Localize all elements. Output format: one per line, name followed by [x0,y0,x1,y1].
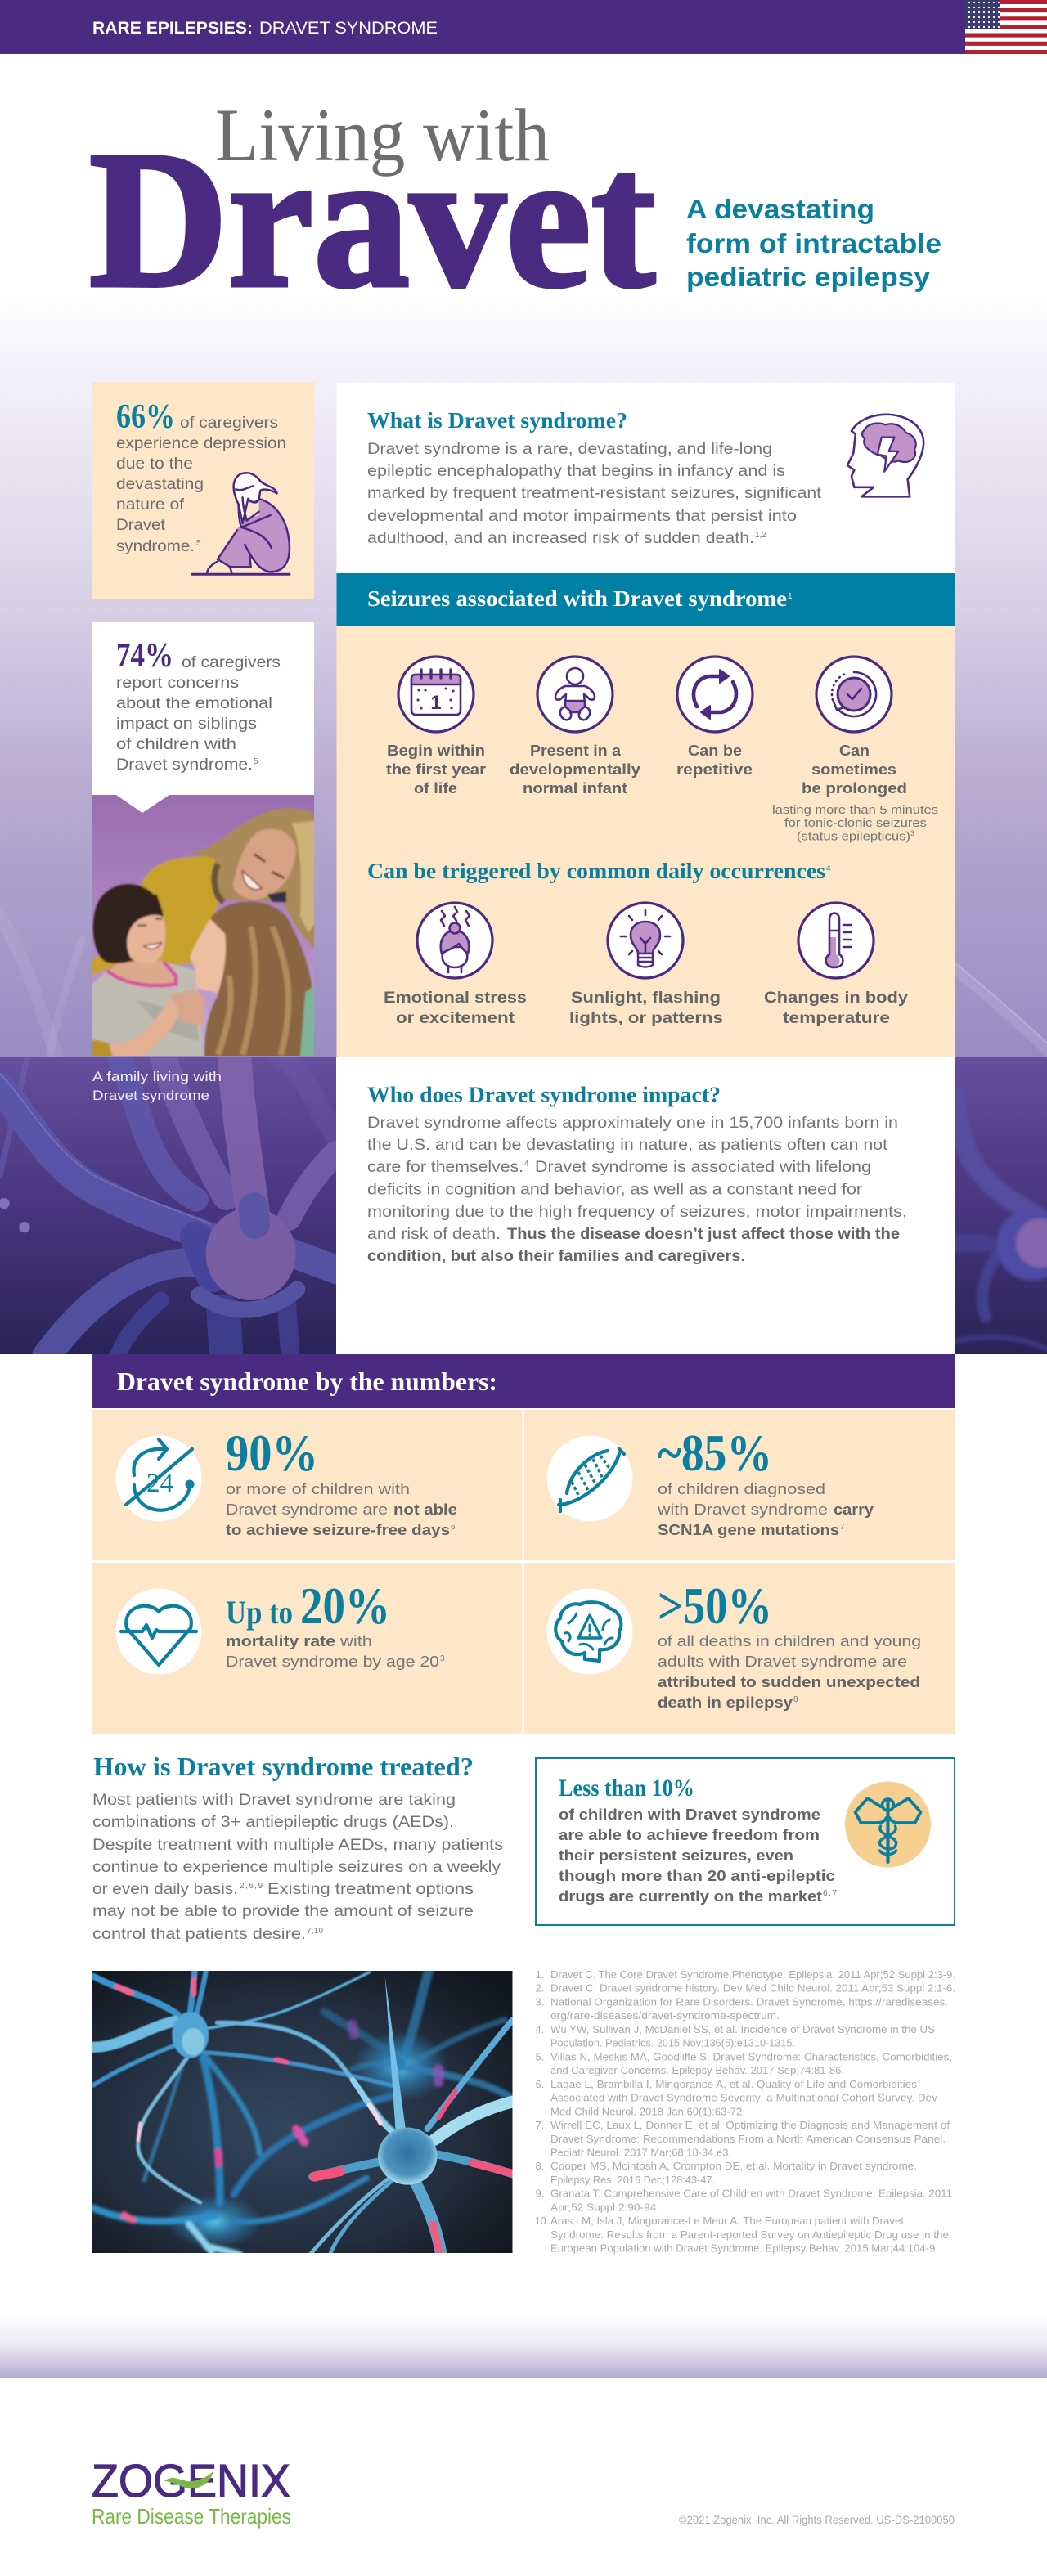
text block: treatment: control that patients desire. [92,1926,306,1943]
photo: neurons [92,1971,513,2255]
stat: 66%: 66% [116,398,175,436]
references: Wirrell EC, Laux L, Donner E, et al. Optimizing the Diagnosis and Management of [550,2119,950,2131]
labels: seizure characteristics: lasting more than 5 minutes [772,803,938,817]
text block: treatment: continue to experience multiple seizures on a weekly [92,1859,501,1876]
references: Population. Pediatrics. 2015 Nov;136(5):e1310-1315. [550,2037,795,2049]
stat panel: >50% [524,1563,955,1734]
references: Dravet C. Dravet syndrome history. Dev Med Child Neurol. 2011 Apr;53 Suppl 2:1-6. [550,1982,955,1995]
text block: treatment: Despite treatment with multiple AEDs, many patients [92,1837,503,1854]
labels: seizure characteristics: (status epilepticus) [797,829,910,844]
caption: A family living with [92,1069,222,1084]
stat panel: >50%: death in epilepsy [658,1694,793,1711]
labels: seizure characteristics: of life [414,779,457,797]
logo: Zogenix [92,2455,291,2529]
labels: triggers: Sunlight, flashing [571,990,721,1007]
references: 2. [535,1982,544,1995]
logo: Zogenix: Rare Disease Therapies [92,2504,291,2529]
band: seizures heading: 1 [788,592,793,601]
header bar [0,0,1047,54]
text block: treatment: combinations of 3+ antiepileptic drugs (AEDs). [92,1814,454,1831]
text block: impact: Thus the disease doesn’t just affect those with the [507,1226,900,1243]
panel: who does Dravet impact [337,1057,955,1354]
text block: impact: Dravet syndrome affects approximately one in 15,700 infants born in [367,1115,898,1132]
stat panel: 90%: to achieve seizure-free days [226,1521,450,1538]
icon: calendar: 1 [430,692,442,714]
references: 9. [535,2188,544,2200]
little girl's face [127,915,165,963]
text block: treatment: Existing treatment options [267,1881,474,1898]
text: depression statement: devastating [116,476,204,493]
labels: seizure characteristics: repetitive [676,761,753,778]
references: Villas N, Meskis MA, Goodliffe S. Dravet Syndrome: Characteristics, Comorbidities, [550,2050,952,2062]
background: dark neuron band left [0,1049,338,1356]
text block: impact: Dravet syndrome is associated with lifelong [535,1159,871,1176]
text: siblings statement: about the emotional [116,695,272,712]
text block: impact: and risk of death. [367,1226,501,1243]
labels: triggers: or excitement [396,1010,515,1027]
icon: US flag [965,0,1047,54]
references: Apr;52 Suppl 2:90-94. [550,2201,659,2213]
footer gradient band [0,2314,1047,2378]
heading: Who does Dravet syndrome impact? [367,1081,721,1107]
text block: definition: developmental and motor impairments that persist into [367,508,797,525]
references: Aras LM, Isla J, Mingorance-Le Meur A. The European patient with Dravet [550,2215,904,2227]
icon: light bulb [608,903,683,978]
references: Epilepsy Res. 2016 Dec;128:43-47. [550,2174,715,2186]
stat panel: 90% [92,1410,522,1560]
band: by the numbers heading [92,1354,955,1408]
band: by the numbers heading: Dravet syndrome by the numbers: [117,1367,497,1396]
header bar: DRAVET SYNDROME [259,18,438,38]
caption: Dravet syndrome [92,1088,209,1103]
text: depression statement: syndrome. [116,538,195,555]
references: 8. [535,2160,544,2172]
stat panel: >50%: attributed to sudden unexpected [658,1673,920,1690]
labels: seizure characteristics: Begin within [387,742,485,759]
references: Associated with Dravet Syndrome Severity: a Multinational Cohort Survey. Dev [550,2092,938,2104]
little girl's neck [109,961,176,985]
stat panel: ~85%: of children diagnosed [658,1480,825,1497]
labels: seizure characteristics: for tonic-clonic seizures [784,816,927,830]
text block: definition: marked by frequent treatment-resistant seizures, significant [367,485,822,502]
text: depression statement [116,415,286,555]
panel: 74% caregivers [92,622,314,795]
text block: definition: adulthood, and an increased risk of sudden death. [367,530,754,547]
icon: heart with ECG [116,1588,201,1675]
sweater [90,856,218,976]
copyright: ©2021 Zogenix, Inc. All Rights Reserved. US-DS-2100050 [679,2514,955,2526]
references: Pediatr Neurol. 2017 Mar;68:18-34.e3. [550,2146,731,2159]
text block: definition: epileptic encephalopathy that begins in infancy and is [367,463,785,480]
callout: less than 10%: are able to achieve freedom from [559,1826,820,1843]
text: siblings statement: impact on siblings [116,716,257,733]
little girl's hair [92,884,164,963]
notch: speech bubble pointer [116,795,169,813]
text block: treatment: may not be able to provide the amount of seizure [92,1903,474,1920]
stat panel: up to 20%: Dravet syndrome by age 20 [226,1653,439,1670]
title: Dravet [89,110,655,328]
references: National Organization for Rare Disorders. Dravet Syndrome. https://rarediseases. [550,1995,948,2008]
icon: 24 hour cycle: 24 [146,1469,173,1498]
subtitle: form of intractable [686,228,941,258]
references: Dravet C. The Core Dravet Syndrome Phenotype. Epilepsia. 2011 Apr;52 Suppl 2:3-9. [550,1968,955,1981]
labels: triggers: lights, or patterns [569,1010,723,1027]
references: Cooper MS, Mcintosh A, Crompton DE, et al. Mortality in Dravet syndrome. [550,2160,917,2172]
subtitle: A devastating [686,194,874,224]
labels: seizure characteristics: be prolonged [802,779,907,797]
panel: what is Dravet syndrome [337,383,955,573]
icon: caduceus [845,1781,931,1868]
icon: repeat arrows [677,657,753,732]
stat panel: >50%: 8 [793,1695,798,1704]
icon: clock [816,657,892,732]
stat panel: 90%: not able [393,1501,457,1518]
references: Dravet Syndrome: Recommendations From a North American Consensus Panel. [550,2133,946,2145]
labels: triggers [384,990,908,1027]
section: how is Dravet treated [92,1752,503,1943]
arm [109,1000,182,1058]
mother's hair [191,808,317,951]
stat panel: ~85%: 7 [840,1523,845,1532]
panel: 66% caregivers [92,382,314,599]
logo: Zogenix: ZOGENIX [92,2455,290,2507]
text: siblings statement: Dravet syndrome. [116,756,253,774]
band: seizures heading [337,573,955,626]
labels: seizure characteristics: sometimes [811,761,896,778]
references: Lagae L, Brambilla I, Mingorance A, et al. Quality of Life and Comorbidities [550,2078,918,2090]
labels: seizure characteristics: Present in a [530,742,622,759]
labels: seizure characteristics: Can be [688,742,742,759]
references: and Caregiver Concerns. Epilepsy Behav. 2017 Sep;74:81-86. [550,2064,844,2076]
stat panel: >50%: >50% [658,1577,772,1635]
references: Wu YW, Sullivan J, McDaniel SS, et al. Incidence of Dravet Syndrome in the US [550,2023,935,2035]
references: Syndrome: Results from a Parent-reported Survey on Antiepileptic Drug use in the [550,2228,949,2241]
icon: thermometer [798,903,874,978]
text block: treatment [92,1792,503,1943]
panel: seizures and triggers [337,626,955,1057]
references: Granata T. Comprehensive Care of Children with Dravet Syndrome. Epilepsia. 2011 [550,2188,952,2200]
labels: seizure characteristics: 3 [910,829,914,837]
icon: stressed woman [417,903,492,978]
text block: impact: deficits in cognition and behavior, as well as a constant need for [367,1181,863,1199]
text: siblings statement: report concerns [116,675,239,692]
older girl's face [191,918,226,993]
labels: triggers: temperature [783,1010,890,1027]
hands [169,990,204,1026]
references: European Population with Dravet Syndrome. Epilepsy Behav. 2015 Mar;44:104-9. [550,2242,938,2255]
callout: less than 10%: Less than 10% [559,1775,694,1802]
older girl's hair [204,901,317,1058]
photo: family living with Dravet syndrome [90,792,317,1058]
text block: treatment: 2,6,9 [240,1882,263,1891]
icon: 24 hour cycle [116,1436,201,1521]
stat panel: up to 20%: 3 [440,1654,445,1663]
stat panel: 90%: 90% [226,1424,318,1482]
stat panel: 90%: 6 [451,1523,456,1532]
stat panel: 90%: Dravet syndrome are [226,1501,388,1518]
text block: definition: Dravet syndrome is a rare, devastating, and life-long [367,441,772,458]
icon: calendar [398,657,474,732]
labels: seizure characteristics [386,742,938,844]
icon: brain with warning [546,1588,633,1675]
text: depression statement: 5 [196,539,201,548]
text block: definition [367,441,822,547]
icon: infant [537,657,613,732]
stat panel: >50%: of all deaths in children and young [658,1632,921,1649]
stat panel: ~85%: ~85% [658,1424,772,1482]
text: siblings statement: of caregivers [182,654,281,671]
heading: How is Dravet syndrome treated? [93,1752,474,1781]
subtitle [686,194,941,292]
labels: seizure characteristics: the first year [386,761,486,778]
band: seizures heading: Seizures associated with Dravet syndrome [367,586,787,611]
references: 6. [535,2078,544,2090]
text: depression statement: experience depression [116,435,286,452]
text block: impact: monitoring due to the high frequency of seizures, motor impairments, [367,1204,907,1221]
stat panel: up to 20%: mortality rate [226,1632,335,1649]
callout: less than 10%: of children with Dravet syndrome [559,1806,820,1823]
references: 4. [535,2023,544,2035]
references: 10. [535,2215,549,2227]
little girl's shirt [90,961,203,1058]
references: 5. [535,2050,544,2062]
icon: DNA [546,1436,633,1521]
text block: treatment: Most patients with Dravet syndrome are taking [92,1792,456,1809]
text block: treatment: 7,10 [307,1927,323,1936]
stat panel: up to 20%: Up to [226,1594,293,1631]
heading: triggers: Can be triggered by common daily occurrences [367,858,825,883]
references: 3. [535,1995,544,2008]
icon: head with brain and lightning [847,415,923,496]
stat panel: ~85%: with Dravet syndrome [657,1501,828,1518]
background: dark neuron band right [955,1057,1047,1354]
callout: less than 10%: though more than 20 anti-epileptic [559,1867,835,1884]
stat panel: up to 20%: with [339,1632,372,1649]
header bar: RARE EPILEPSIES: [92,18,253,38]
stat panel: 90%: or more of children with [226,1480,410,1497]
caption [92,1069,222,1103]
text: depression statement: due to the [116,456,193,473]
stat panel: >50%: adults with Dravet syndrome are [658,1653,907,1670]
labels: triggers: Emotional stress [384,990,527,1007]
background: faint neuron shapes [46,963,1047,1057]
icon: sad seated woman [192,473,290,574]
text: depression statement: Dravet [116,517,166,534]
labels: seizure characteristics: developmentally [510,761,641,778]
text block: treatment: or even daily basis. [92,1881,238,1898]
text: siblings statement [116,654,281,774]
callout: less than 10% [536,1758,955,1925]
stat: 74%: 74% [116,637,173,675]
references: Med Child Neurol. 2018 Jan;60(1):63-72. [550,2105,745,2117]
stat panel: ~85%: carry [834,1501,874,1518]
references: org/rare-diseases/dravet-syndrome-spectrum. [550,2009,780,2022]
subtitle: pediatric epilepsy [686,262,931,292]
text block: impact: condition, but also their families and caregivers. [367,1248,745,1265]
text block: impact: 4 [524,1160,529,1169]
front neuron [385,1977,406,2129]
title: Living with [215,93,550,177]
labels: triggers: Changes in body [764,990,908,1007]
heading: What is Dravet syndrome? [367,407,627,433]
stat panel: up to 20% [92,1563,522,1734]
heading: triggers: 4 [826,864,831,873]
text: depression statement: nature of [116,496,185,514]
mother's face [233,828,296,900]
callout: less than 10%: their persistent seizures, even [559,1847,793,1864]
stat panel: ~85% [524,1410,955,1560]
text block: impact [367,1115,907,1265]
stat panel: ~85%: SCN1A gene mutations [658,1521,839,1538]
text block: definition: 1,2 [755,531,766,540]
text: siblings statement: 5 [254,757,258,766]
callout: less than 10%: 6,7 [823,1889,837,1898]
references: 1. [535,1968,544,1981]
labels: seizure characteristics: normal infant [523,779,627,797]
stat panel: up to 20%: 20% [300,1577,390,1635]
text: siblings statement: of children with [116,736,236,753]
text block: impact: the U.S. and can be devastating in nature, as patients often can not [367,1137,888,1154]
references: 7. [535,2119,544,2131]
text: depression statement: of caregivers [180,415,278,432]
background: lavender gradient [0,294,1047,1057]
text block: impact: care for themselves. [367,1159,524,1176]
references [535,1968,955,2255]
callout: less than 10%: drugs are currently on the market [559,1887,822,1905]
labels: seizure characteristics: Can [839,742,870,759]
